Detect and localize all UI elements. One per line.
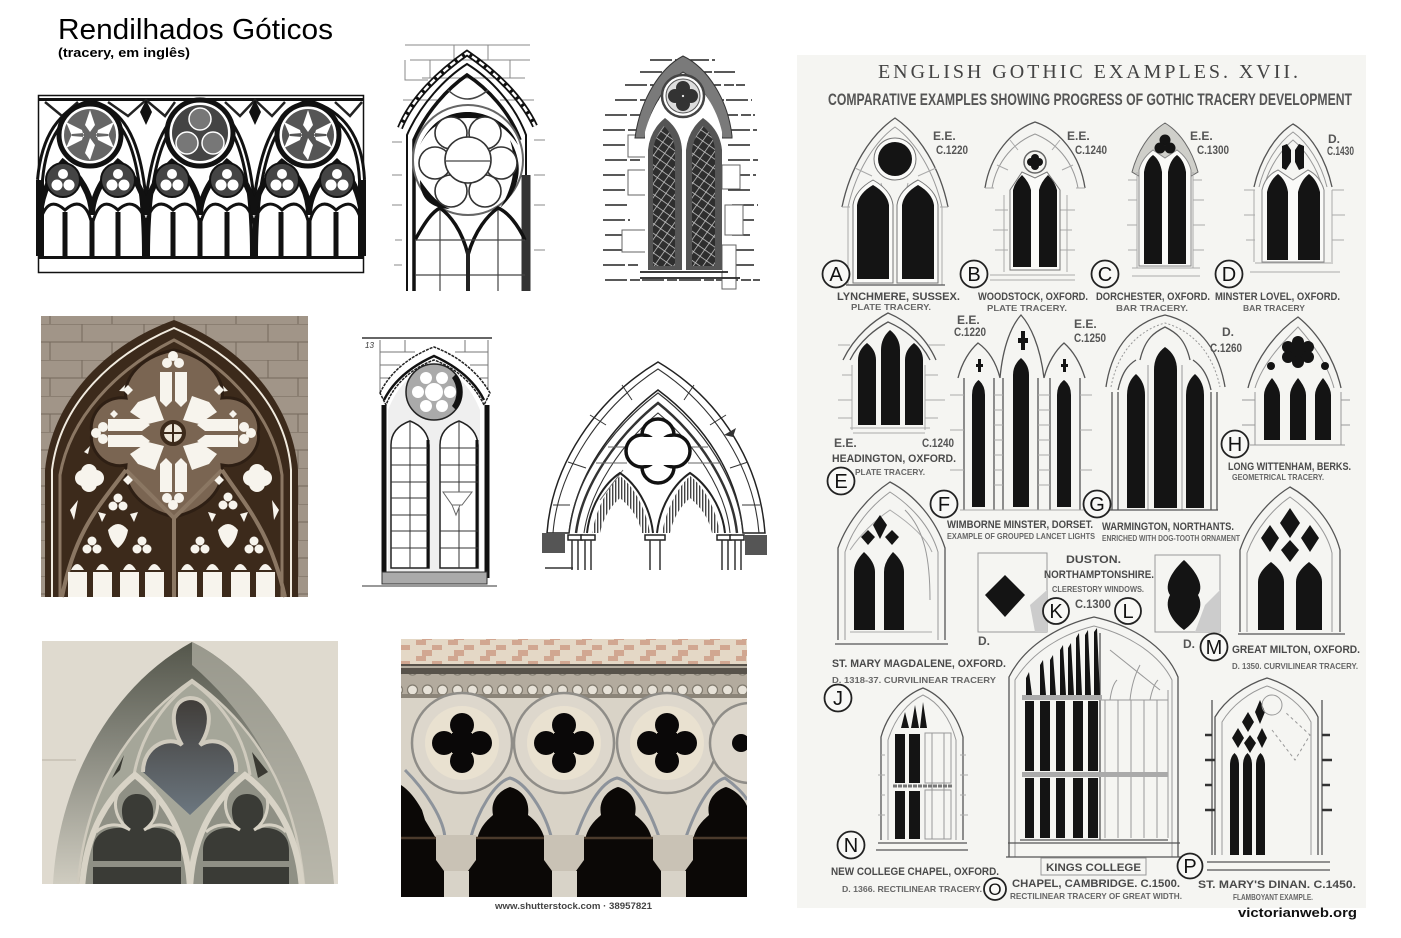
window A [842, 118, 948, 285]
window E [838, 313, 945, 433]
captions second row [832, 453, 1351, 543]
captions second row: WIMBORNE MINSTER, DORSET. [947, 519, 1093, 531]
circle letters second row: H [1228, 434, 1242, 456]
circle letters third row: M [1206, 637, 1222, 659]
circle letters top row [822, 260, 1242, 288]
captions bottom row: FLAMBOYANT EXAMPLE. [1233, 892, 1313, 902]
title: Rendilhados Góticos [58, 14, 333, 46]
circle letters bottom row: N [844, 835, 858, 857]
panel: rose window line drawing [392, 45, 545, 291]
black trefoil openings [401, 785, 747, 840]
dates top row [933, 129, 1354, 158]
captions top row: PLATE TRACERY. [987, 303, 1067, 313]
captions bottom row: NEW COLLEGE CHAPEL, OXFORD. [831, 866, 999, 878]
dates top row: C.1300 [1197, 143, 1229, 157]
dates top row: E.E. [1067, 129, 1090, 143]
circle letters bottom row [838, 832, 1202, 900]
panel: twin lancet window sketch [603, 56, 760, 289]
panel: photo Venetian quatrefoil arcade [401, 639, 747, 897]
captions top row: PLATE TRACERY. [851, 302, 931, 312]
captions second row: WARMINGTON, NORTHANTS. [1102, 521, 1234, 533]
captions second row: EXAMPLE OF GROUPED LANCET LIGHTS [947, 531, 1095, 541]
captions second row: GEOMETRICAL TRACERY. [1232, 472, 1324, 482]
Duston caption: D. [978, 634, 990, 648]
captions bottom row: ST. MARY'S DINAN. C.1450. [1198, 879, 1356, 891]
captions top row: BAR TRACERY [1243, 303, 1305, 313]
window D [1244, 124, 1345, 272]
captions bottom row: CHAPEL, CAMBRIDGE. C.1500. [1012, 878, 1180, 890]
circle letters top row: D [1222, 264, 1236, 286]
source credit: victorianweb.org [1238, 905, 1357, 920]
dates top row: D. [1328, 132, 1340, 146]
captions third row: D. 1350. CURVILINEAR TRACERY. [1232, 661, 1358, 671]
dates second row: C.1220 [954, 325, 986, 339]
captions second row: HEADINGTON, OXFORD. [832, 453, 956, 465]
dates top row: C.1240 [1075, 143, 1107, 157]
captions top row: DORCHESTER, OXFORD. [1096, 291, 1210, 303]
shutterstock credit: www.shutterstock.com · 38957821 [494, 901, 652, 911]
circle letters second row: G [1089, 494, 1105, 516]
captions top row [837, 291, 1340, 313]
panel: tall twin lancet with rose drawing [362, 338, 497, 586]
Duston caption: CLERESTORY WINDOWS. [1052, 584, 1144, 594]
captions top row: MINSTER LOVEL, OXFORD. [1215, 291, 1340, 303]
rose quatrefoil [91, 350, 259, 517]
captions top row: WOODSTOCK, OXFORD. [978, 291, 1088, 303]
window N New College [876, 688, 968, 850]
circle letters third row: L [1122, 601, 1134, 623]
dates top row: E.E. [933, 129, 956, 143]
captions top row: LYNCHMERE, SUSSEX. [837, 291, 960, 303]
captions bottom row [831, 862, 1356, 902]
captions third row [832, 644, 1360, 685]
windows K and L clerestory [978, 553, 1220, 632]
dates top row: E.E. [1190, 129, 1213, 143]
panel: photo sepia rose tracery [41, 316, 308, 597]
window H [1242, 317, 1350, 445]
window O Kings College [1006, 617, 1182, 875]
panel: English Gothic Examples plate [797, 55, 1366, 908]
panel: tall twin lancet with rose drawing: 13 [365, 341, 374, 350]
window P St Mary's Dinan [1205, 678, 1332, 870]
subtitle: (tracery, em inglês) [58, 45, 190, 60]
window F [950, 315, 1092, 510]
window B [985, 122, 1085, 280]
circle letters second row [828, 430, 1248, 518]
captions top row: BAR TRACERY. [1116, 303, 1188, 313]
captions bottom row: D. 1366. RECTILINEAR TRACERY. [842, 884, 982, 894]
captions bottom row: RECTILINEAR TRACERY OF GREAT WIDTH. [1010, 891, 1182, 901]
window C [1127, 123, 1205, 276]
Duston caption [978, 554, 1195, 651]
captions second row: PLATE TRACERY. [855, 467, 925, 477]
Duston caption: DUSTON. [1066, 554, 1121, 566]
captions third row: ST. MARY MAGDALENE, OXFORD. [832, 658, 1006, 670]
circle letters top row: C [1098, 264, 1112, 286]
dates second row: E.E. [1074, 317, 1097, 331]
circle letters bottom row: O [988, 880, 1002, 899]
dates second row: D. [1222, 325, 1234, 339]
circle letters third row: K [1049, 601, 1063, 623]
circle letters third row [824, 598, 1228, 712]
dates second row: E.E. [957, 313, 980, 327]
circle letters second row: E [834, 471, 848, 493]
Duston caption: NORTHAMPTONSHIRE. [1044, 569, 1154, 581]
dates second row: C.1240 [922, 436, 954, 450]
panel: photo stone arch [42, 641, 338, 890]
captions bottom row: KINGS COLLEGE [1046, 862, 1141, 874]
captions third row: GREAT MILTON, OXFORD. [1232, 644, 1360, 656]
circle letters second row: F [938, 494, 950, 516]
title [58, 14, 333, 60]
circle letters bottom row: P [1183, 856, 1197, 878]
dates second row: C.1260 [1210, 341, 1242, 355]
Duston caption: D. [1183, 637, 1195, 651]
window St Mary Magdalene [835, 482, 948, 644]
circle letters top row: B [967, 264, 981, 286]
plate title: ENGLISH GOTHIC EXAMPLES. XVII. [878, 61, 1298, 83]
Duston caption: C.1300 [1075, 597, 1111, 611]
captions third row: D. 1318-37. CURVILINEAR TRACERY [832, 675, 996, 685]
window G [1105, 315, 1225, 510]
window M Great Milton [1238, 487, 1345, 634]
circle letters third row: J [833, 688, 843, 710]
dates second row: E.E. [834, 436, 857, 450]
panel: arch with quatrefoil drawing [542, 362, 767, 570]
dates top row: C.1220 [936, 143, 968, 157]
circle letters top row: A [829, 264, 843, 286]
captions second row: ENRICHED WITH DOG-TOOTH ORNAMENT [1102, 533, 1241, 543]
dates top row: C.1430 [1327, 144, 1354, 158]
dates second row [834, 313, 1242, 450]
dates second row: C.1250 [1074, 331, 1106, 345]
captions second row: LONG WITTENHAM, BERKS. [1228, 461, 1351, 473]
panel: tracery frieze engraving [38, 96, 364, 272]
